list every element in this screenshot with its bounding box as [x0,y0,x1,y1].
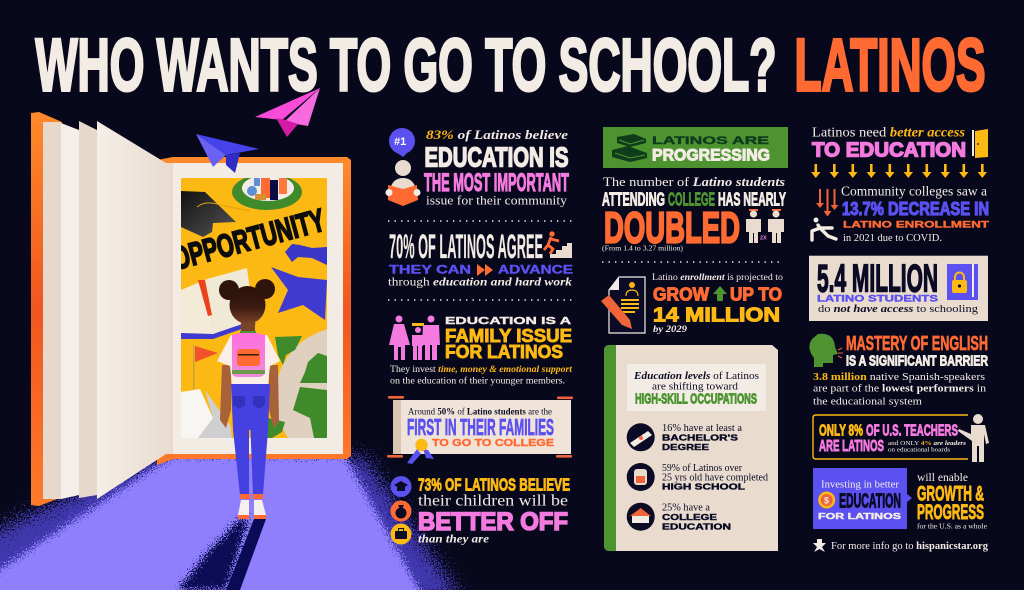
panel: family issue: on the education of their younger members. [390,375,565,385]
panel: latinos are progressing [603,127,788,168]
panel: enrollment growth: UP TO [730,285,782,305]
divider [388,299,572,301]
page three [79,121,97,498]
panel: enrollment growth [601,272,784,335]
opportunity picture [181,178,327,438]
panel: enrollment growth: GROW [653,285,709,305]
panel: education levels: HIGH SCHOOL [662,482,745,492]
panel: better off: 73% OF LATINOS BELIEVE [418,475,570,495]
panel: investing: will enable [917,472,968,484]
panel: investing [813,468,988,530]
panel: enrollment growth: by 2029 [653,325,687,335]
green oval with people [232,178,302,210]
panel: better off: their children will be [418,493,568,510]
panel: investing: FOR LATINOS [818,512,902,521]
right page [166,163,343,454]
panel: college nearly doubled: (From 1.4 to 3.27 million) [602,244,684,253]
panel: college nearly doubled: 2X [760,236,767,242]
icon: star [813,539,826,552]
panel: latinos are progressing: PROGRESSING [652,146,770,165]
globe [267,329,327,438]
icon: door [972,129,988,158]
panel: better access: TO EDUCATION [812,140,966,162]
icon: number one bubble: #1 [394,136,406,148]
panel: better off: BETTER OFF [418,508,568,536]
panel: better access [811,126,988,178]
panel: college nearly doubled: COLLEGE [668,190,715,210]
hair buns [219,280,239,300]
panel: mastery of english: are part of the lowest performers in [813,383,987,395]
white mountain [181,389,232,438]
panel: enrollment growth: Latino enrollment is projected to [652,272,784,282]
panel: enrollment decrease: 13.7% DECREASE IN [842,199,989,219]
shoes [238,500,249,515]
panel: education levels: Education levels of Latinos [633,371,759,382]
panel: education levels [604,345,778,551]
panel: most important issue: issue for their community [426,192,568,208]
panel: education levels: 59% of Latinos over [662,463,743,474]
panel: education levels: 25% have a [662,503,711,514]
icon: teacher [958,414,989,462]
panel: college nearly doubled: ATTENDING [602,190,665,210]
panel: college nearly doubled: HAS NEARLY [718,190,786,210]
panel: 70 percent agree [388,228,573,288]
panel: college nearly doubled: DOUBLED [604,204,740,252]
ankles [240,494,250,499]
flag [193,345,218,389]
panel: mastery of english: 3.8 million native Spanish-speakers [813,371,985,383]
panel: latinos are progressing: LATINOS ARE [652,135,769,147]
panel: education levels: DEGREE [662,442,709,452]
collar [240,331,256,334]
panel: enrollment decrease: LATINO ENROLLMENT [843,220,989,231]
icon: money bag circle [390,500,412,522]
front page [97,121,173,499]
panel: education levels: are shifting toward [652,382,739,392]
panel: better off [390,475,570,545]
icon: briefcase circle [390,524,412,544]
icon: yellow arrows row [811,164,987,178]
icon: speaking head [809,334,843,367]
icon: medal [407,439,434,464]
icon: runner on stairs [544,231,572,258]
neck [241,322,255,337]
panel: most important issue: EDUCATION IS [424,142,568,172]
panel: better access: Latinos need better access [812,126,966,141]
panel: family issue: FOR LATINOS [445,342,563,362]
icon: coin: $ [824,496,829,506]
panel: college nearly doubled: The number of Latino students [603,174,785,189]
opportunity word: OPPORTUNITY [168,202,328,277]
panel: 5.4 million: do not have access to schooling [818,304,979,315]
shadow [178,519,249,590]
page block [43,122,61,499]
panel: most important issue [386,127,569,208]
panel: 70 percent agree: ADVANCE [498,264,573,276]
panel: education levels: EDUCATION [662,521,731,531]
shirt [217,335,280,384]
divider [388,220,572,222]
arms [220,365,231,428]
panel: 5.4 million: LATINO STUDENTS [817,294,938,305]
head [230,286,266,324]
book back cover [157,157,351,465]
icon: cap circle [390,476,412,497]
page two [61,123,79,499]
panel: college nearly doubled [602,174,786,253]
panel: education levels: HIGH-SKILL OCCUPATIONS [635,392,757,408]
icon: green arrow [713,286,727,301]
panel: teachers: and ONLY 4% are leaders [888,440,967,447]
panel: teachers: OF U.S. TEACHERS [866,423,958,440]
icon: diploma [627,423,655,451]
floor light [0,456,462,590]
panel: family issue: FAMILY ISSUE [445,326,572,346]
panel: education levels: BACHELOR'S [662,433,738,443]
panel: investing: for the U.S. as a whole [917,522,988,530]
blue star [271,267,327,320]
left cover [31,112,62,506]
panel: teachers [813,414,989,462]
panel: scroll first in family: Around 50% of Latino students are the [408,406,552,416]
icon: locked book [947,264,978,300]
panel: scroll first in family [387,396,573,464]
panel: family issue: EDUCATION IS A [445,315,572,327]
panel: enrollment decrease: Community colleges saw a [841,184,987,199]
open book [181,268,256,339]
panel: teachers: ONLY 8% [819,423,863,440]
blue ribbon [285,244,327,265]
panel: better off: than they are [418,533,489,545]
icon: double arrow [477,264,493,276]
icon: school building [627,503,655,531]
panel: teachers: ARE LATINOS [819,438,884,455]
icon: family [389,316,440,360]
icon: number one bubble [389,128,415,157]
divider [602,261,783,263]
panel: most important issue: 83% of Latinos believe [426,127,568,142]
panel: 70 percent agree: THEY CAN [389,264,471,276]
icon: falling person [812,218,836,240]
graduation cap [181,191,250,237]
panel: enrollment decrease [812,184,989,244]
backpack [232,333,265,377]
panel: most important issue: THE MOST IMPORTANT [424,169,569,197]
panel: 5.4 million [809,256,988,321]
text: 70% OF LATINOS AGREE [389,228,543,266]
pants [231,384,270,495]
icon: reader with book [386,160,420,206]
panel: mastery of english: the educational system [813,395,922,407]
icon: backpack [627,463,655,491]
illustration: girl at open book [0,112,462,590]
panel: family issue: They invest time, money & emotional support [390,364,573,374]
icon: books [612,134,647,162]
pockets [233,396,265,409]
footer: more info: For more info go to hispanicstar.org [831,540,988,552]
panel: investing: EDUCATION [839,490,901,512]
panel: scroll first in family: TO GO TO COLLEGE [432,437,554,449]
panel: teachers: on educational boards [888,446,951,454]
panel: education levels: 16% have at least a [662,423,743,434]
panel: family issue [389,315,573,385]
panel: enrollment growth: 14 MILLION [653,305,780,327]
panel: mastery of english [809,332,988,407]
icon: document and pencil [601,277,645,333]
icon: orange down arrows [816,189,838,216]
girl [178,279,280,590]
panel: 70 percent agree: through education and hard work [388,274,572,288]
panel: enrollment decrease: in 2021 due to COVID. [843,233,942,244]
panel: scroll first in family: FIRST IN THEIR FAMILIES [407,414,554,440]
panel: investing: Investing in better [821,479,900,490]
panel: education levels: 25 yrs old have completed [662,472,768,483]
icon: blue paper plane [196,134,259,173]
icon: two graduates [746,209,784,243]
icon: coin [818,492,835,508]
panel: education levels: COLLEGE [662,512,717,522]
icon: pink paper plane [255,88,320,137]
